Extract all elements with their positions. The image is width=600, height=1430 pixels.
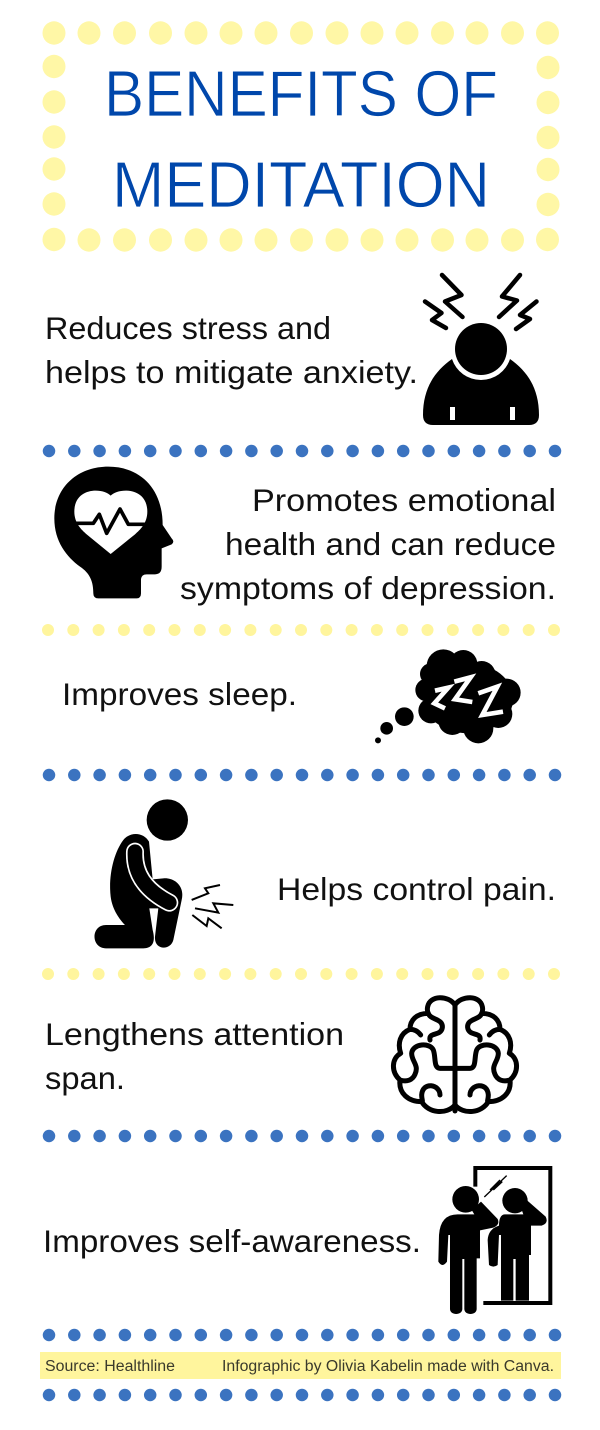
divider: blue dots: [49, 1130, 556, 1142]
divider: blue dots: [49, 1329, 556, 1341]
text: attention: Lengthens attention: [45, 1016, 344, 1052]
text: emotional health: Promotes emotional: [252, 482, 556, 518]
text: self-awareness: Improves self-awareness.: [43, 1223, 421, 1259]
divider: yellow dots: [48, 968, 555, 980]
title: BENEFITS OF: [104, 57, 498, 130]
divider: yellow dots: [48, 624, 555, 636]
text: emotional health: [180, 482, 556, 606]
text: attention: [45, 1016, 344, 1096]
icon: brain: [393, 998, 517, 1112]
text: pain: Helps control pain.: [277, 871, 556, 907]
title frame of yellow dots: [42, 21, 560, 252]
text: stress: [45, 310, 418, 390]
icon: head with heart: [54, 467, 173, 598]
text: emotional health: symptoms of depression.: [180, 570, 556, 606]
text: attention: span.: [45, 1060, 125, 1096]
text: sleep: Improves sleep.: [62, 676, 297, 712]
footer band: [40, 1352, 561, 1379]
footer band: Source: Healthline: [45, 1358, 175, 1375]
icon: person at mirror: [438, 1168, 550, 1314]
text: emotional health: health and can reduce: [225, 526, 556, 562]
icon: thought cloud with Zs: [375, 649, 521, 743]
title: MEDITATION: [112, 148, 490, 221]
divider: blue dots: [49, 769, 556, 781]
text: stress: helps to mitigate anxiety.: [45, 354, 418, 390]
icon: kneeling person with knee pain: [94, 799, 233, 948]
divider: blue dots: [49, 445, 556, 457]
footer band: Infographic by Olivia Kabelin made with Canva.: [222, 1358, 554, 1375]
title: [104, 57, 498, 221]
text: stress: Reduces stress and: [45, 310, 331, 346]
icon: stressed person: [423, 275, 539, 425]
divider: blue dots: [49, 1389, 556, 1401]
